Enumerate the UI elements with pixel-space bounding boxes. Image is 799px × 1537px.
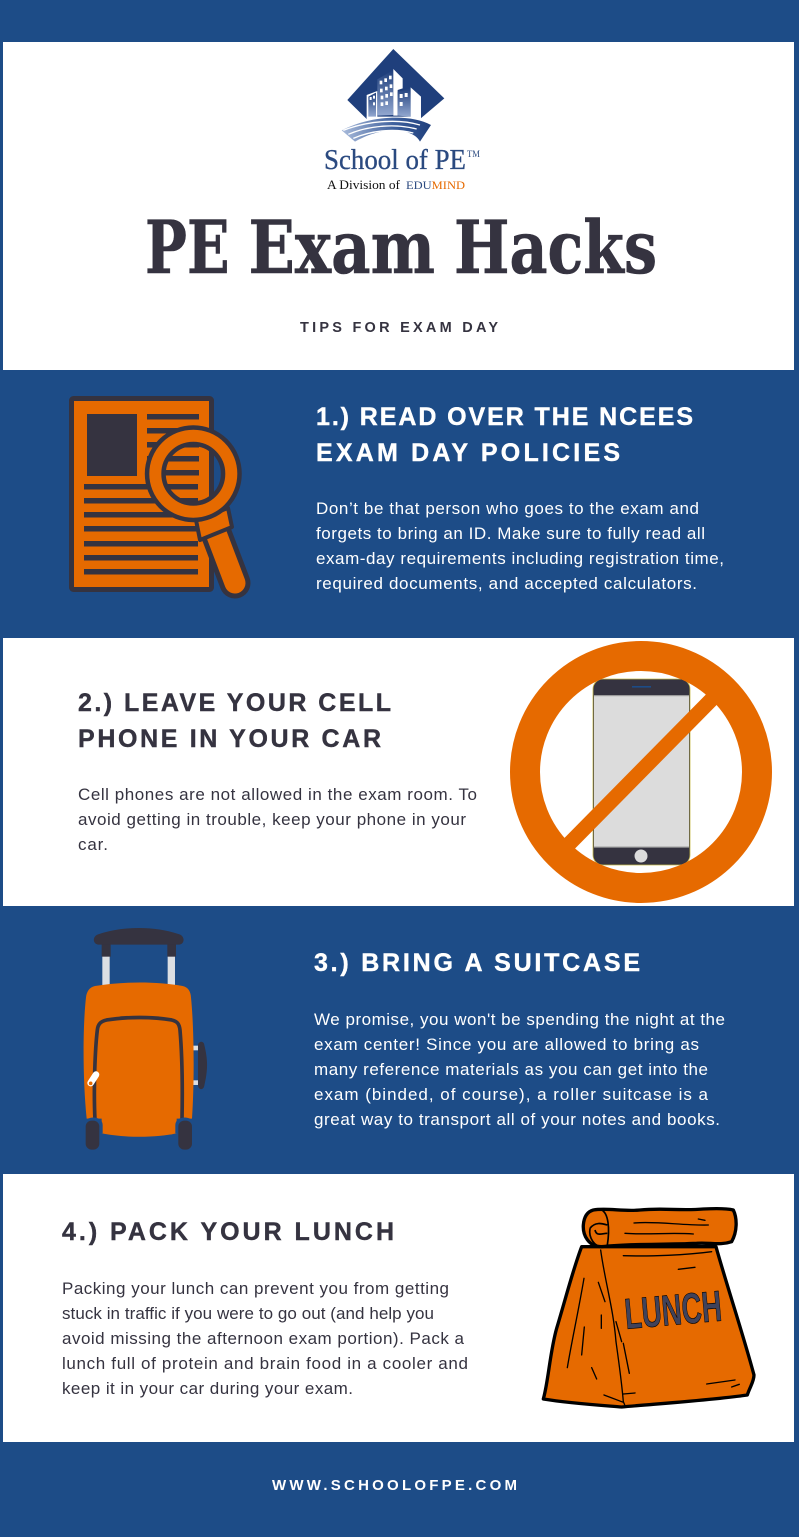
panel: tip 1	[72, 398, 724, 593]
panel: tip 3	[84, 928, 725, 1150]
title	[145, 205, 657, 291]
panel: tip 4	[3, 1174, 794, 1442]
icon: document with magnifying glass	[72, 398, 235, 590]
body text: keep it in your car during your exam.	[62, 1379, 353, 1398]
icon: School of PE logo: A Division of	[327, 177, 401, 192]
heading	[78, 689, 391, 753]
body text: required documents, and accepted calculators.	[316, 574, 697, 593]
title: Exam	[248, 205, 435, 291]
icon: lunch bag	[543, 1209, 754, 1407]
heading	[316, 403, 693, 467]
heading: 2.) LEAVE YOUR CELL	[78, 689, 391, 717]
icon: lunch bag: LUNCH	[623, 1283, 724, 1339]
body text: great way to transport all of your notes and books.	[314, 1110, 720, 1129]
body text: Packing your lunch can prevent you from getting	[62, 1279, 449, 1298]
title: PE	[145, 205, 230, 291]
icon: School of PE logo	[324, 49, 480, 192]
body text: We promise, you won't be spending the night at the	[314, 1010, 725, 1029]
body text: exam-day requirements including registration time,	[316, 549, 724, 568]
body text	[62, 1279, 468, 1398]
body text	[78, 785, 477, 854]
body text: exam (binded, of course), a roller suitcase is a	[314, 1085, 709, 1104]
footer link: WWW.SCHOOLOFPE.COM	[272, 1477, 517, 1494]
body text: car.	[78, 835, 108, 854]
icon: suitcase	[84, 928, 207, 1150]
body text	[316, 499, 724, 593]
body text: exam center! Since you are allowed to bring as	[314, 1035, 699, 1054]
body text: avoid getting in trouble, keep your phone in your	[78, 810, 466, 829]
body text: stuck in traffic if you were to go out (and help you	[62, 1304, 434, 1323]
heading: 4.) PACK YOUR LUNCH	[62, 1218, 394, 1246]
icon: School of PE logo: TM	[467, 149, 480, 159]
body text	[314, 1010, 725, 1129]
icon: School of PE logo: School of PE	[324, 144, 466, 176]
heading: 1.) READ OVER THE NCEES	[316, 403, 693, 431]
icon: no phones	[525, 656, 757, 888]
body text: lunch full of protein and brain food in a cooler and	[62, 1354, 468, 1373]
body text: avoid missing the afternoon exam portion). Pack a	[62, 1329, 465, 1348]
heading: 3.) BRING A SUITCASE	[314, 949, 640, 977]
heading: PHONE IN YOUR CAR	[78, 725, 381, 753]
panel: tip 2	[3, 638, 794, 906]
panel: header	[3, 42, 794, 370]
icon: School of PE logo: EDUMIND	[406, 178, 465, 192]
body text: Don’t be that person who goes to the exam and	[316, 499, 699, 518]
title: Hacks	[454, 205, 657, 291]
body text: forgets to bring an ID. Make sure to fully read all	[316, 524, 705, 543]
subtitle: TIPS FOR EXAM DAY	[300, 320, 498, 336]
body text: many reference materials as you can get into the	[314, 1060, 708, 1079]
body text: Cell phones are not allowed in the exam room. To	[78, 785, 477, 804]
heading: EXAM DAY POLICIES	[316, 439, 620, 467]
